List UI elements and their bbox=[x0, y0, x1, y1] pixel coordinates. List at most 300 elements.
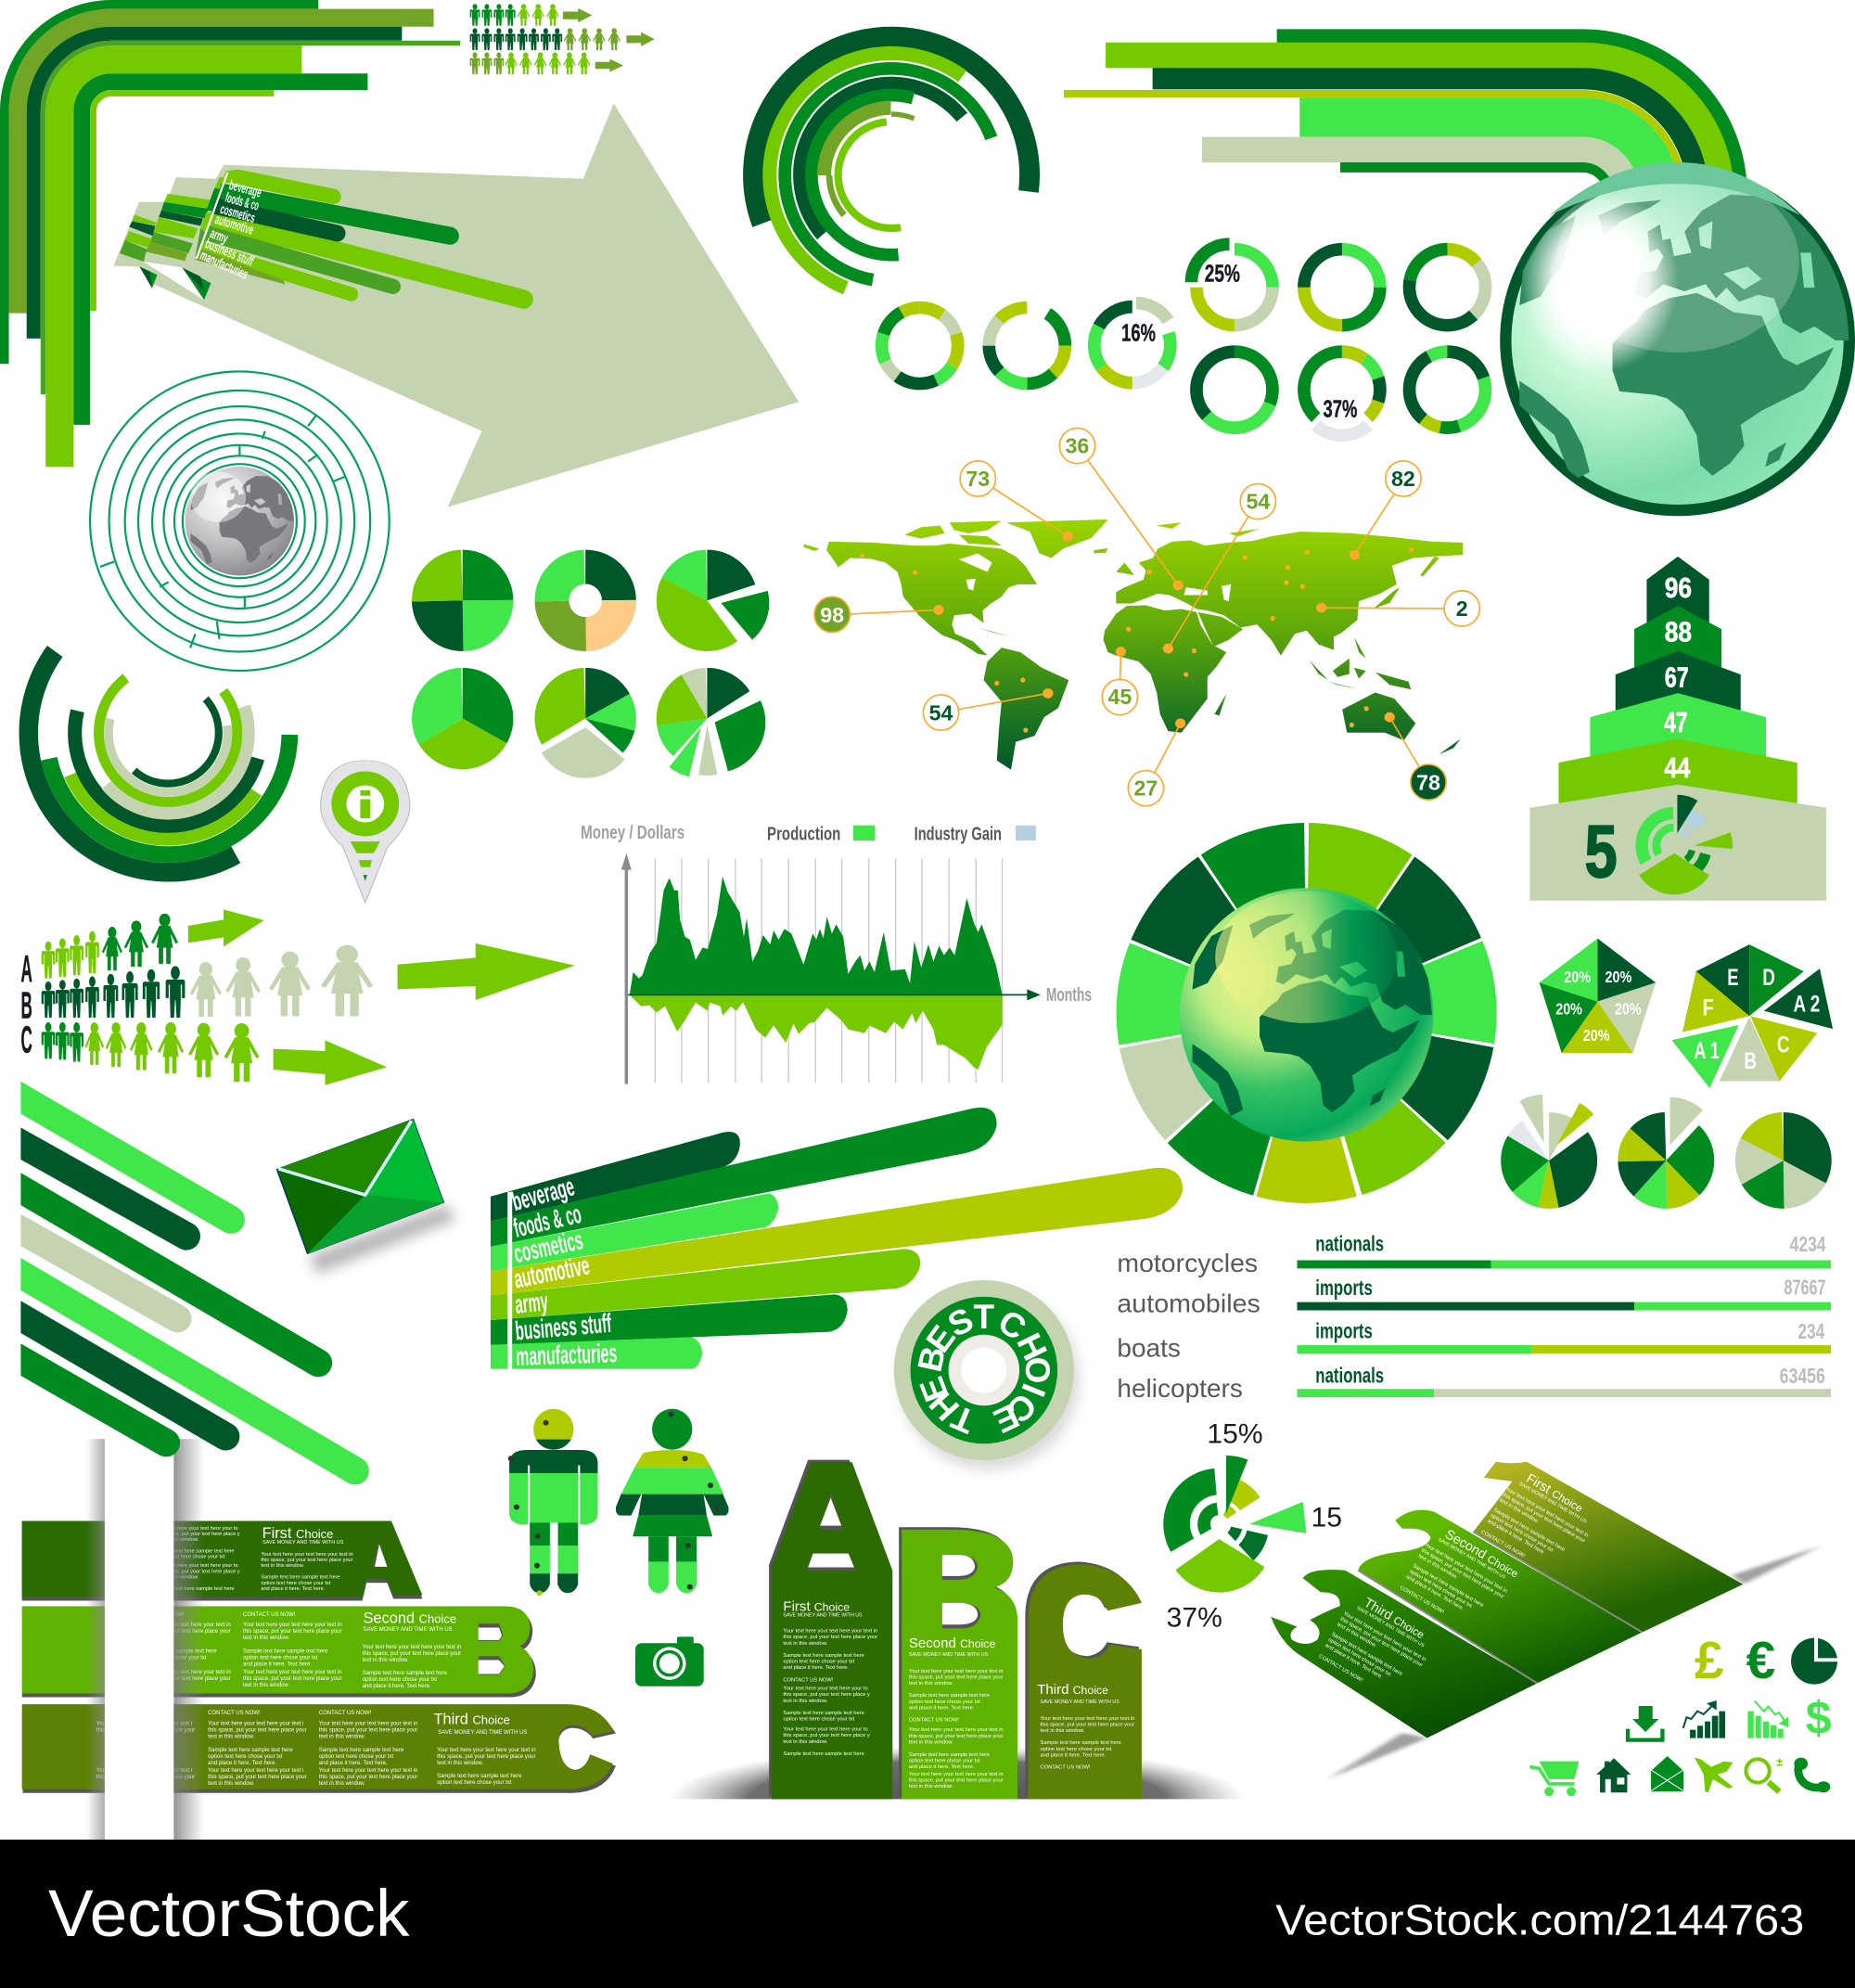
banner row C text: and place it here. Text here. bbox=[208, 1761, 276, 1766]
icon: chart up bbox=[1683, 1700, 1725, 1738]
banner row C text: and place it here. Text here. bbox=[319, 1761, 388, 1766]
slanted bar labels bbox=[509, 1172, 618, 1372]
map callouts bbox=[814, 428, 1479, 806]
pentagon labels: 20% bbox=[1555, 999, 1582, 1018]
banner row B text: Your text here your text here your text in bbox=[132, 1670, 231, 1675]
ribbon 1 text: SAVE MONEY AND TIME WITH US bbox=[1518, 1481, 1588, 1525]
ribbon 3 text: option text here chose your txt bbox=[1327, 1637, 1392, 1678]
banner row B text: text in this window. bbox=[363, 1658, 409, 1663]
tall column A text: option text here chose your txt bbox=[783, 1660, 855, 1665]
ribbon 1 text: Sample text here sample text here bbox=[1492, 1507, 1566, 1553]
ribbon 3 text: and place it here. Text here. bbox=[1324, 1643, 1384, 1681]
banner row C text: SAVE MONEY AND TIME WITH US bbox=[438, 1730, 527, 1736]
banner row A text: First Choice bbox=[262, 1525, 333, 1542]
pyramid chart: 67 bbox=[1665, 661, 1689, 693]
banner row B text: Sample text here sample text here bbox=[243, 1649, 328, 1655]
big green globe bbox=[1505, 162, 1851, 510]
radial chart labels: 15 bbox=[1311, 1503, 1342, 1533]
banner row C text: text in this window. bbox=[319, 1734, 365, 1739]
fold triangles and rear bars of the arrow fan bbox=[113, 177, 227, 300]
letter pentagon labels: B bbox=[1744, 1049, 1757, 1074]
mini radial chart bbox=[1642, 813, 1713, 878]
tall column C text: Third Choice bbox=[1037, 1682, 1108, 1698]
category names: motorcycles bbox=[1117, 1249, 1258, 1277]
donut 4 bbox=[1191, 244, 1273, 326]
horizontal progress bars: nationals bbox=[1315, 1363, 1384, 1387]
banner row B text: option text here chose your txt bbox=[363, 1677, 437, 1683]
banner row B text: SAVE MONEY AND TIME WITH US bbox=[364, 1627, 453, 1633]
ribbon 3 text: SAVE MONEY AND TIME WITH US bbox=[1356, 1606, 1426, 1649]
letter pentagon labels: A 2 bbox=[1794, 993, 1820, 1018]
icon: chart down bbox=[1747, 1701, 1788, 1738]
ribbon 2 text: Your text here your text here your text in bbox=[1424, 1543, 1508, 1595]
tall column B bbox=[899, 1527, 1017, 1799]
best choice badge: E bbox=[988, 1396, 1025, 1441]
banner row C text bbox=[96, 1711, 536, 1787]
footer bar bbox=[0, 1840, 1855, 1988]
tall column B text: and place it here. Text here. bbox=[909, 1705, 975, 1711]
donut charts bbox=[882, 244, 1486, 435]
large pale arrow bbox=[113, 103, 799, 507]
ribbon 2 text: SAVE MONEY AND TIME WITH US bbox=[1437, 1537, 1506, 1581]
banner row C text: Your text here your text here your text i bbox=[208, 1768, 303, 1774]
tall column A text: First Choice bbox=[783, 1598, 850, 1614]
tall column A text: text in this window. bbox=[783, 1699, 828, 1704]
three small pie charts bbox=[1520, 1119, 1808, 1185]
fan labels: army bbox=[208, 225, 230, 247]
banner row B text: Second Choice bbox=[364, 1610, 456, 1626]
area chart bbox=[621, 853, 1041, 1084]
map callouts: 82 bbox=[1391, 467, 1415, 491]
icon: search: ± bbox=[1776, 1756, 1783, 1769]
text: B bbox=[21, 983, 32, 1026]
tall column B text: Sample text here sample text here bbox=[909, 1752, 990, 1758]
man figure bbox=[508, 1409, 597, 1596]
icon: plane bbox=[1695, 1758, 1733, 1792]
world map bbox=[804, 519, 1463, 770]
camera icon bbox=[635, 1636, 704, 1687]
footer url text: VectorStock.com/2144763 bbox=[1275, 1896, 1804, 1944]
ribbon 1 text: this space, put your text here place your bbox=[1502, 1493, 1586, 1545]
banner row C text: text in this window. bbox=[208, 1734, 255, 1739]
tall column C text: this space, put your text here place your bbox=[1041, 1723, 1134, 1728]
A B C row letters bbox=[21, 947, 32, 1060]
fan labels: business stuff bbox=[203, 236, 256, 270]
banner row B text: text in this window. bbox=[243, 1635, 289, 1641]
banner row C text: Your text here your text here your text in bbox=[319, 1768, 417, 1774]
map callouts: 73 bbox=[966, 467, 990, 491]
tall column B text: CONTACT US NOW! bbox=[909, 1717, 959, 1723]
labyrinth circles with grey globe bbox=[90, 371, 390, 671]
tall column A text: Sample text here sample text here bbox=[783, 1711, 864, 1716]
banner row A text bbox=[155, 1525, 353, 1592]
banner row B text: this space, put your text here place your bbox=[132, 1676, 231, 1682]
white vertical strip with shadows bbox=[86, 1439, 204, 1840]
icon: dollar: $ bbox=[1806, 1692, 1832, 1744]
tall column A text: CONTACT US NOW! bbox=[783, 1677, 834, 1683]
tall column B text: this space, put your text here place your bbox=[909, 1778, 1004, 1783]
horizontal progress bars: 87667 bbox=[1784, 1275, 1826, 1299]
best choice badge bbox=[894, 1280, 1079, 1469]
ribbon 2 text bbox=[1399, 1520, 1521, 1637]
banner row A text: this space, put your text here place y bbox=[155, 1569, 240, 1574]
people groups A B C bbox=[42, 909, 575, 1085]
icon: envelope bbox=[1651, 1756, 1683, 1791]
donut 2 bbox=[989, 308, 1065, 384]
info map pin bbox=[321, 761, 410, 903]
banner row B text: Your text here your text here your text in bbox=[132, 1622, 231, 1628]
tall column C bbox=[1025, 1562, 1142, 1799]
tall column A text: this space, put your text here place your bbox=[783, 1635, 877, 1640]
ribbon 2 text: CONTACT US NOW! bbox=[1399, 1585, 1445, 1615]
category names: boats bbox=[1117, 1333, 1181, 1362]
map callouts: 2 bbox=[1456, 596, 1468, 621]
icon: house bbox=[1596, 1758, 1631, 1792]
banner row B text: and place it here. Text here. bbox=[363, 1684, 431, 1689]
tall column A text: Your text here your text here your to bbox=[783, 1687, 868, 1692]
map callouts: 27 bbox=[1133, 776, 1158, 801]
banner row C text: Your text here your text here your text in bbox=[437, 1748, 536, 1753]
letter pentagon labels: A 1 bbox=[1694, 1039, 1720, 1064]
banner row C text: Sample text here sample text here bbox=[437, 1774, 522, 1779]
banner row B text: Your text here your text here your text in bbox=[363, 1645, 461, 1650]
horizontal progress bars bbox=[1297, 1231, 1831, 1397]
banner row B text: Your text here your text here your text in bbox=[243, 1670, 342, 1675]
banner row B text: Sample text here sample text here bbox=[363, 1671, 448, 1676]
banner row C text: Third Choice bbox=[434, 1712, 510, 1728]
ribbon 1 text: and place it here. Text here. bbox=[1486, 1519, 1546, 1557]
banner row B text: option text here chose your txt bbox=[132, 1655, 207, 1661]
fan labels: cosmetics bbox=[218, 201, 257, 226]
banner row A text: Your text here your text here your to bbox=[155, 1563, 238, 1569]
best choice badge: H bbox=[922, 1384, 966, 1428]
banner row C text: this space, put your text here place your bbox=[319, 1775, 417, 1780]
tall column B text: Second Choice bbox=[909, 1635, 995, 1651]
donut 6 bbox=[1409, 250, 1486, 326]
ribbon 3 text: Sample text here sample text here bbox=[1330, 1632, 1403, 1677]
banner row A text: Your text here your text here your to bbox=[155, 1526, 238, 1532]
radial chart labels bbox=[1167, 1418, 1342, 1633]
tall column A text bbox=[783, 1598, 877, 1757]
tall column C text: and place it here. Text here. bbox=[1041, 1752, 1107, 1758]
banner row C text: this space, put your text here place your bbox=[96, 1775, 195, 1780]
ribbon 3 text bbox=[1318, 1589, 1439, 1706]
envelope icon bbox=[276, 1119, 456, 1275]
ribbon 2 text: and place it here. Text here. bbox=[1405, 1574, 1465, 1612]
donut percent labels: 25% bbox=[1205, 259, 1240, 287]
tall column B text: this space, put your text here place your bbox=[909, 1675, 1004, 1681]
tall column A text: Your text here your text here your text in bbox=[783, 1629, 877, 1635]
ribbon 1 bbox=[1473, 1462, 1743, 1633]
donut percent labels bbox=[1121, 259, 1357, 423]
category names bbox=[1117, 1249, 1260, 1403]
pentagon labels: 20% bbox=[1606, 968, 1631, 986]
pyramid chart bbox=[1529, 557, 1826, 901]
row C bbox=[22, 1704, 616, 1793]
donut 1 bbox=[882, 308, 958, 384]
ribbon 2 text: Second Choice bbox=[1442, 1527, 1521, 1581]
tall column A text: Sample text here sample text here bbox=[783, 1751, 864, 1757]
map callouts: 54 bbox=[1246, 490, 1270, 514]
horizontal progress bars: 63456 bbox=[1780, 1364, 1825, 1388]
tall column A text: text in this window. bbox=[783, 1641, 828, 1647]
horizontal progress bars: 234 bbox=[1797, 1319, 1824, 1343]
ribbon 3 text: this space, put your text here place your bbox=[1339, 1616, 1424, 1669]
ribbon 3 bbox=[1271, 1570, 1537, 1738]
slanted bar labels: manufacturies bbox=[516, 1339, 618, 1372]
people rows top bbox=[470, 4, 655, 74]
banner row A text: text in this window. bbox=[155, 1574, 199, 1580]
banner row C text: this space, put your text here place your bbox=[437, 1754, 536, 1760]
best choice badge: S bbox=[942, 1300, 979, 1344]
banner row C text: this space, put your text here place your bbox=[208, 1775, 307, 1780]
banner row B text: Sample text here sample text here bbox=[132, 1649, 217, 1655]
ribbon 1 text: First Choice bbox=[1524, 1471, 1585, 1516]
letter pentagon labels: C bbox=[1777, 1032, 1790, 1058]
numbered ribbons 1 2 3 bbox=[1271, 1462, 1743, 1738]
pie 4 bbox=[437, 693, 488, 744]
map callouts: 98 bbox=[820, 603, 844, 627]
footer brand text: VectorStock bbox=[48, 1878, 410, 1951]
icon: pound: £ bbox=[1695, 1632, 1723, 1690]
slanted bar labels: automotive bbox=[512, 1251, 592, 1294]
banner row C text: Your text here your text here your text i bbox=[96, 1768, 192, 1774]
tall column A text: this space, put your text here place y bbox=[783, 1733, 870, 1738]
map city dots bbox=[860, 532, 1414, 733]
banner row B text: and place it here. Text here. bbox=[243, 1662, 312, 1668]
tall column C text: Sample text here sample text here bbox=[1041, 1740, 1121, 1746]
icon: pie chart bbox=[1791, 1635, 1840, 1685]
horizontal progress bars: nationals bbox=[1315, 1231, 1384, 1255]
radial wedge chart bbox=[1177, 1481, 1306, 1567]
ribbon 3 text: text in this window. bbox=[1336, 1622, 1377, 1649]
pyramid chart: 96 bbox=[1665, 572, 1692, 604]
map callouts: 78 bbox=[1416, 770, 1440, 794]
donut 3 bbox=[1094, 303, 1174, 383]
tall column B text: this space, put your text here place your bbox=[909, 1734, 1004, 1739]
banner row A text: this space, put your text here place your bbox=[261, 1558, 353, 1563]
diagonal stripes left bbox=[0, 1075, 355, 1470]
tall column A text: text in this window. bbox=[783, 1739, 828, 1745]
slanted bar labels: cosmetics bbox=[511, 1225, 585, 1269]
tall column C text: Your text here your text here your text in bbox=[1041, 1716, 1134, 1722]
banner row A text: Sample text here sample text here bbox=[155, 1586, 235, 1592]
banner row C text: text in this window. bbox=[208, 1781, 255, 1787]
fan labels: manufacturies bbox=[198, 248, 250, 283]
pentagon 20 percent chart bbox=[1540, 939, 1656, 1053]
donut percent labels: 37% bbox=[1324, 395, 1357, 423]
ground shadow under tall letters bbox=[675, 1748, 1239, 1800]
text: C bbox=[21, 1018, 32, 1060]
icon: search bbox=[1746, 1756, 1783, 1791]
map callouts: 54 bbox=[929, 700, 953, 725]
banner row C text: Your text here your text here your text in bbox=[319, 1722, 417, 1727]
small pie 1 bbox=[1520, 1119, 1580, 1185]
donut 5 bbox=[1304, 250, 1380, 326]
banner row C text: CONTACT US NOW! bbox=[208, 1711, 261, 1716]
horizontal progress bars: imports bbox=[1315, 1319, 1373, 1343]
map callouts: 45 bbox=[1107, 685, 1132, 709]
best choice badge: C bbox=[991, 1302, 1033, 1348]
slanted bar labels: army bbox=[514, 1287, 549, 1320]
pie 1 bbox=[437, 575, 488, 626]
pentagon labels: 20% bbox=[1564, 968, 1591, 986]
slanted bar labels: foods & co bbox=[511, 1199, 584, 1244]
banner row C text: this space, put your text here place your bbox=[319, 1728, 417, 1734]
letter pentagon labels: F bbox=[1703, 996, 1714, 1021]
corner stripes top left bbox=[5, 5, 460, 467]
ribbon 1 text: text in this window. bbox=[1498, 1497, 1540, 1525]
banner row A text: text in this window. bbox=[155, 1537, 199, 1543]
banner row A text: text in this window. bbox=[261, 1563, 304, 1569]
tall column B text: and place it here. Text here. bbox=[909, 1764, 975, 1770]
letter pentagon labels bbox=[1694, 966, 1820, 1074]
banner row A text: and place it here. Text here. bbox=[261, 1586, 326, 1592]
pyramid chart: 88 bbox=[1665, 617, 1692, 648]
banner row B text: this space, put your text here place your bbox=[243, 1676, 341, 1682]
tall column B text: text in this window. bbox=[909, 1784, 953, 1789]
banner row B text: Your text here your text here your text in bbox=[243, 1622, 342, 1628]
tall column B text bbox=[909, 1635, 1004, 1789]
slanted category bars bbox=[491, 1108, 1183, 1369]
slanted bar labels: business stuff bbox=[514, 1309, 613, 1347]
stripes flowing into globe bbox=[1064, 36, 1740, 194]
text: A bbox=[21, 947, 32, 990]
ribbon 2 text: text in this window. bbox=[1417, 1554, 1459, 1581]
icon set bottom right bbox=[1529, 1632, 1840, 1796]
tall letter columns A B C bbox=[769, 1460, 1142, 1799]
tall column C text: option text here chose your txt bbox=[1041, 1747, 1112, 1752]
icon: phone bbox=[1794, 1758, 1830, 1792]
letter pentagon labels: E bbox=[1727, 966, 1739, 991]
tall column A text: Sample text here sample text here bbox=[783, 1653, 864, 1659]
pyramid chart: 47 bbox=[1664, 707, 1687, 738]
fan labels: automotive bbox=[213, 212, 255, 238]
segmented ring with globe bbox=[1155, 861, 1459, 1165]
ring arcs left bbox=[29, 594, 308, 872]
best choice badge: T bbox=[974, 1298, 995, 1336]
woman figure bbox=[616, 1409, 729, 1593]
banner row B text bbox=[132, 1610, 461, 1689]
letter pentagon labels: D bbox=[1762, 966, 1775, 991]
banner row C text: Your text here your text here your text i bbox=[96, 1722, 192, 1727]
fan labels: foods & co bbox=[224, 190, 261, 214]
banner row A text: Sample text here sample text here bbox=[261, 1575, 340, 1581]
tall column C text bbox=[1037, 1682, 1134, 1770]
pie 2 with hole bbox=[560, 575, 611, 626]
row A bbox=[22, 1521, 422, 1601]
ribbon 2 text: option text here chose your txt bbox=[1408, 1569, 1473, 1610]
ribbon 3 text: CONTACT US NOW! bbox=[1318, 1654, 1364, 1684]
horizontal progress bars: 4234 bbox=[1790, 1232, 1826, 1256]
tall column C text: SAVE MONEY AND TIME WITH US bbox=[1041, 1699, 1119, 1705]
pyramid chart: 5 bbox=[1585, 810, 1618, 892]
ribbon 1 text bbox=[1479, 1465, 1602, 1582]
banner row B text: CONTACT US NOW! bbox=[132, 1612, 185, 1618]
tall column A text: option text here chose your txt bbox=[783, 1716, 855, 1722]
map callouts: 36 bbox=[1066, 434, 1089, 458]
banner row B text: this space, put your text here place your bbox=[132, 1629, 231, 1635]
tall column B text: option text here chose your txt bbox=[909, 1699, 980, 1705]
fan labels: beverage bbox=[227, 177, 263, 201]
concentric arcs top centre bbox=[713, 0, 1069, 353]
tall column A text: Your text here your text here your to bbox=[783, 1727, 868, 1733]
ribbon 1 text: Your text here your text here your text in bbox=[1504, 1487, 1589, 1539]
banner row C text: option text here chose your txt bbox=[437, 1780, 512, 1786]
banner row A text: option text here chose your txt bbox=[261, 1581, 331, 1586]
tall column B text: Sample text here sample text here bbox=[909, 1693, 990, 1699]
banner row C text: Sample text here sample text here bbox=[319, 1748, 404, 1753]
banner row B text: text in this window. bbox=[243, 1683, 289, 1688]
tall column B text: SAVE MONEY AND TIME WITH US bbox=[909, 1652, 989, 1658]
donut 9 bbox=[1409, 352, 1486, 428]
chart legend and axis labels bbox=[581, 822, 1092, 1006]
folded ribbons shadows bbox=[1327, 1546, 1821, 1779]
banner row C text: option text here chose your txt bbox=[208, 1754, 283, 1760]
banner row A text: this space, put your text here place y bbox=[155, 1532, 240, 1537]
donut 8 bbox=[1304, 352, 1380, 435]
tall column A text: this space, put your text here place y bbox=[783, 1692, 870, 1698]
tall column B text: Your text here your text here your text in bbox=[909, 1727, 1004, 1733]
tall column B text: option text here chose your txt bbox=[909, 1758, 980, 1764]
chart legend and axis labels: Industry Gain bbox=[915, 823, 1002, 844]
pyramid chart: 44 bbox=[1664, 752, 1690, 784]
icon: download bbox=[1628, 1706, 1662, 1740]
pie 5 bbox=[560, 693, 611, 752]
chart legend and axis labels: Money / Dollars bbox=[581, 822, 684, 843]
category names: helicopters bbox=[1117, 1374, 1243, 1403]
tall column A bbox=[769, 1460, 892, 1799]
banner row A text: option text here chose your txt bbox=[155, 1554, 225, 1559]
best choice badge: C bbox=[1000, 1386, 1043, 1430]
donut 7 bbox=[1196, 352, 1273, 428]
banner row C text: CONTACT US NOW! bbox=[319, 1711, 372, 1716]
pie 3 bbox=[682, 575, 745, 627]
banner row B text: CONTACT US NOW! bbox=[243, 1612, 296, 1618]
tall column A text: and place it here. Text here. bbox=[783, 1665, 850, 1671]
tall column A text: SAVE MONEY AND TIME WITH US bbox=[783, 1612, 863, 1618]
icon: cart bbox=[1529, 1762, 1579, 1796]
small pie 3 bbox=[1759, 1136, 1808, 1185]
pentagon labels bbox=[1555, 968, 1642, 1045]
chart legend and axis labels: Months bbox=[1046, 984, 1092, 1006]
pie 6 bbox=[675, 693, 740, 752]
banner row C text: Your text here your text here your text i bbox=[208, 1722, 303, 1727]
chart legend and axis labels: Production bbox=[767, 823, 840, 844]
tall column B text: Your text here your text here your text in bbox=[909, 1772, 1004, 1777]
row B bbox=[22, 1607, 536, 1698]
best choice badge: H bbox=[1009, 1327, 1055, 1366]
ribbon 2 text: this space, put your text here place your bbox=[1420, 1548, 1504, 1600]
small pie 2 bbox=[1642, 1122, 1694, 1185]
banner row B text: option text here chose your txt bbox=[243, 1655, 318, 1661]
banner row C text: text in this window. bbox=[437, 1761, 483, 1766]
best choice badge: E bbox=[912, 1372, 956, 1406]
best choice badge: O bbox=[1018, 1357, 1056, 1383]
banner row A text: Sample text here sample text here bbox=[155, 1548, 235, 1554]
pentagon labels: 20% bbox=[1583, 1026, 1610, 1045]
ribbon 1 text: option text here chose your txt bbox=[1490, 1513, 1554, 1554]
ribbon 1 text: CONTACT US NOW! bbox=[1479, 1530, 1527, 1559]
banner row C text: option text here chose your txt bbox=[319, 1754, 394, 1760]
ribbon 3 text: Your text here your text here your text in bbox=[1342, 1611, 1426, 1663]
ribbon 2 text: Sample text here sample text here bbox=[1412, 1563, 1484, 1609]
horizontal progress bars: imports bbox=[1315, 1276, 1373, 1300]
banner row B text: this space, put your text here place your bbox=[363, 1651, 461, 1657]
tall column B text: Your text here your text here your text in bbox=[909, 1669, 1004, 1674]
tall column C text: CONTACT US NOW! bbox=[1041, 1764, 1091, 1770]
tall column C text: text in this window. bbox=[1041, 1728, 1085, 1734]
